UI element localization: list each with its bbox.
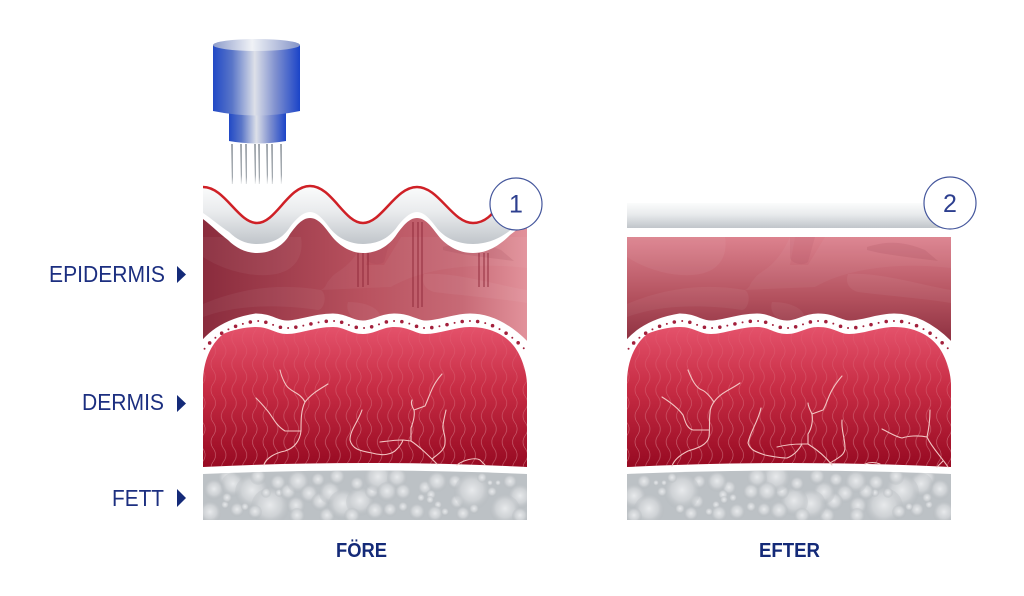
panel: efter bbox=[622, 177, 976, 562]
step badge 2 bbox=[924, 177, 976, 229]
epidermis layer före bbox=[203, 184, 527, 350]
label: fett: FETT bbox=[112, 485, 164, 511]
applicator: microneedling device bbox=[213, 39, 300, 187]
blood vessels före bbox=[256, 370, 485, 465]
label: epidermis: EPIDERMIS bbox=[49, 261, 165, 287]
smooth skin surface efter bbox=[627, 203, 951, 228]
device: lower collar bbox=[229, 112, 286, 144]
label: dermis: DERMIS bbox=[82, 389, 164, 415]
infographic: före och efter bbox=[50, 39, 977, 557]
caption före: FÖRE bbox=[336, 539, 387, 562]
device: needles bbox=[231, 144, 282, 187]
caption efter: EFTER bbox=[759, 540, 821, 562]
blood vessels efter bbox=[662, 370, 948, 467]
step badge 1: 1 bbox=[509, 190, 523, 218]
step badge 2: 2 bbox=[943, 190, 957, 218]
dermis layer efter bbox=[624, 320, 954, 470]
step badge 1 bbox=[490, 178, 542, 230]
needle channels bbox=[358, 222, 488, 308]
device: upper cylinder bbox=[213, 39, 300, 116]
fat layer före bbox=[199, 464, 532, 526]
fat layer efter bbox=[622, 464, 955, 526]
panel: före bbox=[199, 178, 542, 562]
skin surface wave före bbox=[203, 186, 515, 244]
epidermis layer efter bbox=[627, 237, 951, 350]
dermis layer före bbox=[200, 320, 530, 470]
